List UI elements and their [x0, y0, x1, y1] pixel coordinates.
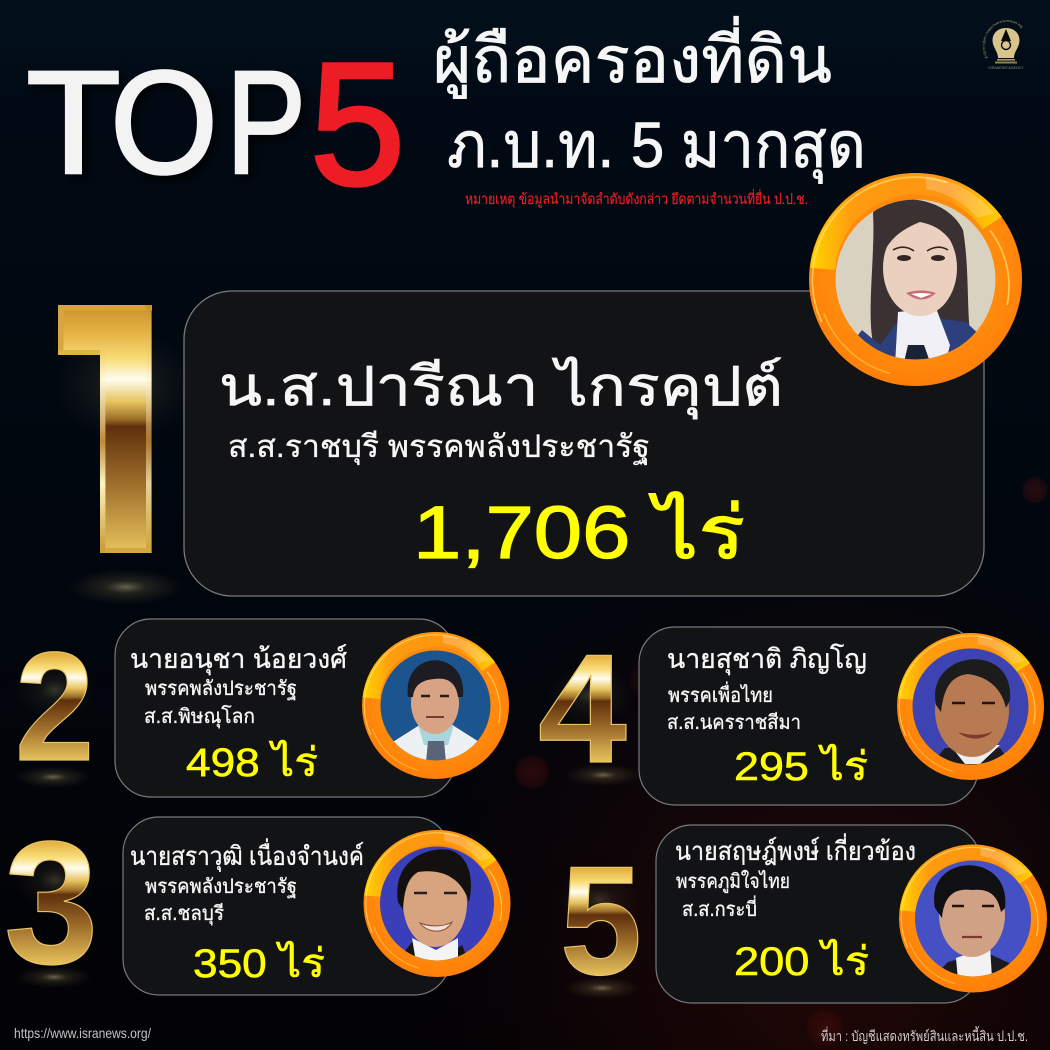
rank 4 area: 295 ไร่ — [734, 744, 868, 789]
avatar: rank 5 — [899, 844, 1047, 992]
rank 2 constituency: ส.ส.พิษณุโลก — [144, 705, 255, 729]
title: TOP 5 — [26, 26, 405, 221]
portrait — [915, 860, 1032, 980]
rank 3 name: นายสราวุฒิ เนื่องจำนงค์ — [130, 838, 364, 872]
title word TOP — [26, 41, 306, 205]
ring — [897, 633, 1044, 780]
portrait — [912, 648, 1029, 765]
footer: website: https://www.isranews.org/ — [14, 1025, 151, 1041]
numeral 4: 4 — [538, 623, 627, 795]
panel: rank 5 — [656, 825, 980, 1003]
portrait — [380, 846, 494, 965]
rank 2 party: พรรคพลังประชารัฐ — [145, 678, 297, 700]
ring — [364, 830, 510, 977]
ring — [362, 632, 509, 779]
rank 5 area: 200 ไร่ — [734, 939, 869, 984]
numeral 1 — [58, 305, 174, 602]
numeral 5: 5 — [560, 835, 642, 1008]
panel 1 background — [184, 291, 984, 596]
note: หมายเหตุ ข้อมูลนำมาจัดลำดับดังกล่าว ยึดตามจำนวนที่ยื่น ป.ป.ช. — [465, 189, 808, 208]
logo: pen nib emblem: ISRANEWS AGENCY — [988, 66, 1024, 70]
rank 1 name: น.ส.ปารีณา ไกรคุปต์ — [219, 356, 783, 420]
rank 3 constituency: ส.ส.ชลบุรี — [144, 903, 224, 926]
ring — [899, 844, 1047, 992]
rank 1 area: 1,706 ไร่ — [413, 491, 745, 574]
panel 2 background — [115, 619, 455, 797]
portrait — [380, 650, 492, 765]
rank 3 party: พรรคพลังประชารัฐ — [145, 876, 297, 898]
panel: rank 1 — [184, 291, 984, 596]
heading line 2: ภ.บ.ท. 5 มากสุด — [447, 109, 866, 184]
panel: rank 4 — [639, 627, 978, 805]
rank 5 name: นายสฤษฎ์พงษ์ เกี่ยวข้อง — [675, 833, 916, 866]
title word TOP: O — [110, 41, 218, 205]
rank 4 name: นายสุชาติ ภิญโญ — [667, 644, 867, 676]
logo: pen nib emblem: สำนักข่าวอิศรา https://www.isranews.org — [982, 20, 1023, 59]
title word TOP: T — [26, 41, 121, 205]
rank 5 constituency: ส.ส.กระบี่ — [682, 895, 757, 921]
panel 3 background — [123, 817, 450, 995]
portrait — [835, 199, 996, 365]
rank 2 name: นายอนุชา น้อยวงศ์ — [130, 643, 347, 676]
numeral 2: 2 — [15, 619, 94, 793]
panel: rank 2 — [115, 619, 455, 797]
rank 4 party: พรรคเพื่อไทย — [668, 681, 773, 707]
panel 4 background — [639, 627, 978, 805]
panel: rank 3 — [123, 817, 450, 995]
numeral 3: 3 — [4, 805, 98, 1001]
rank 3 area: 350 ไร่ — [193, 941, 325, 986]
rank 4 constituency: ส.ส.นครราชสีมา — [667, 712, 801, 734]
heading: Thai title — [433, 16, 866, 184]
avatar: rank 2 — [362, 632, 509, 779]
rank 2 area: 498 ไร่ — [186, 740, 318, 785]
ring — [809, 173, 1022, 386]
title numeral 5: 5 — [310, 26, 405, 221]
avatar: rank 1 — [809, 173, 1022, 386]
avatar: rank 4 — [897, 633, 1044, 780]
rank 1 party: ส.ส.ราชบุรี พรรคพลังประชารัฐ — [228, 429, 650, 466]
rank 5 party: พรรคภูมิใจไทย — [676, 870, 790, 894]
panel 5 background — [656, 825, 980, 1003]
heading line 1: ผู้ถือครองที่ดิน — [433, 16, 832, 99]
numeral 1: 1 — [21, 211, 222, 702]
avatar: rank 3 — [364, 830, 510, 977]
title word TOP: P — [226, 41, 306, 205]
